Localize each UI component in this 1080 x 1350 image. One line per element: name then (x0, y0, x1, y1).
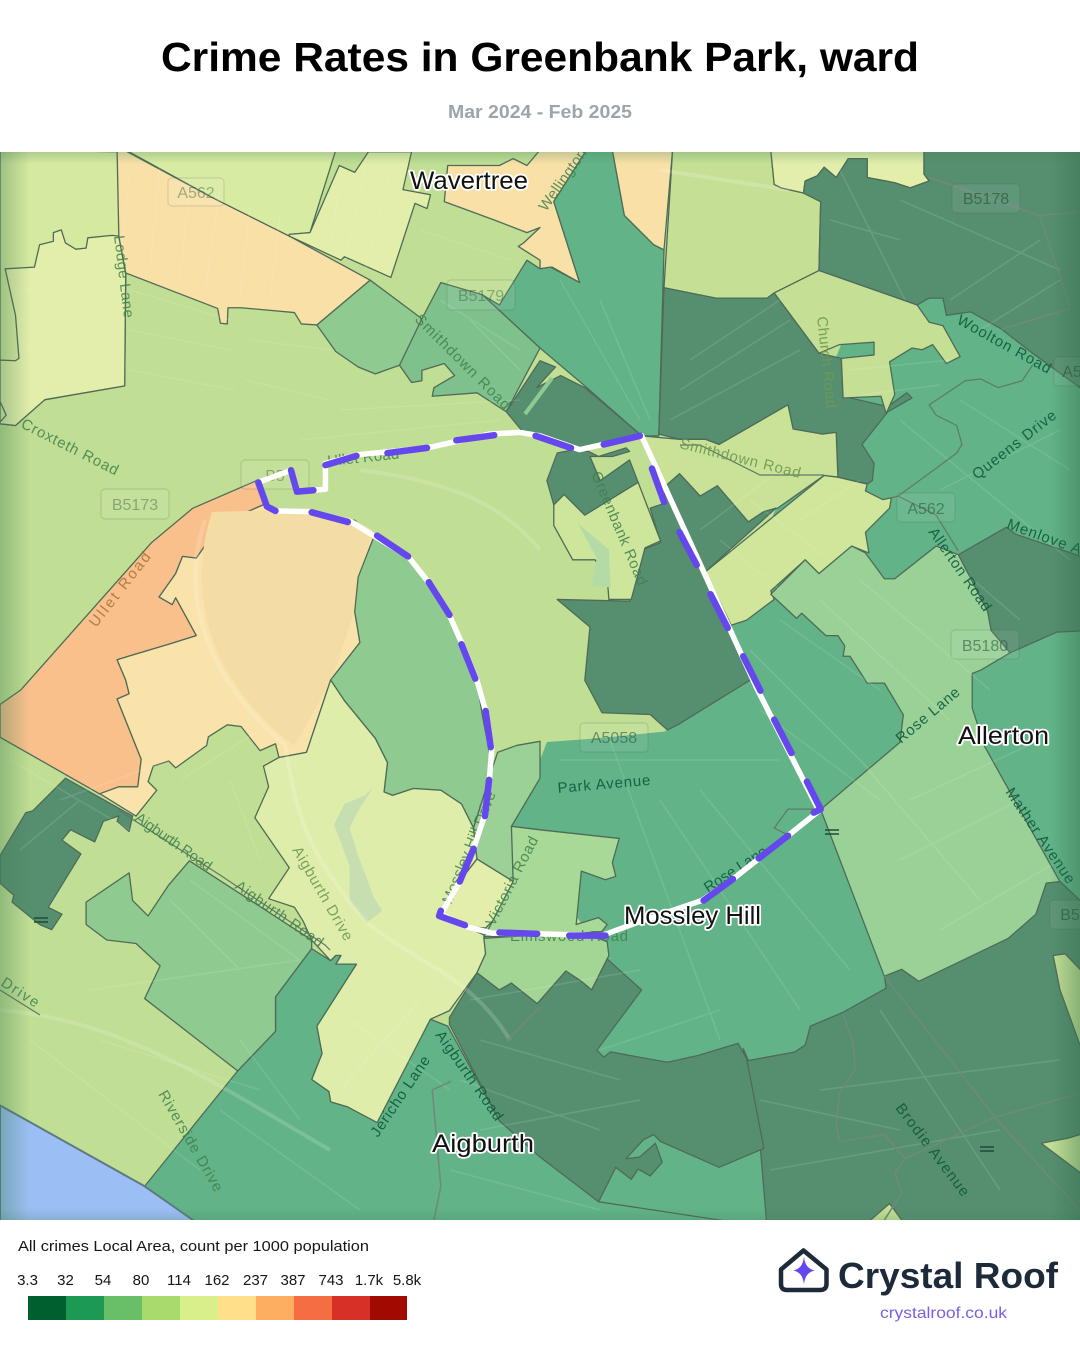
legend value labels: 80 (133, 1272, 149, 1289)
legend value labels: 32 (57, 1272, 74, 1289)
region: north pale block (664, 150, 821, 298)
shield A562 east: A562 (907, 501, 945, 518)
legend colour scale (28, 1296, 407, 1320)
label: Church Road: Church Road (813, 316, 840, 409)
region: dark centre north (659, 288, 912, 484)
region: mid green below Elmswood (477, 933, 609, 1004)
legend value labels: 162 (204, 1272, 230, 1289)
shield A5058 (580, 723, 648, 752)
region: dark Menlove (958, 527, 1080, 653)
label: Riverside Drive: Riverside Drive (155, 1088, 226, 1195)
region: large medium green east (511, 288, 1080, 1231)
label: Queens Drive: Queens Drive (969, 407, 1060, 483)
region: light striped Victoria Road (484, 826, 619, 937)
shield B5 east: B5 (1060, 907, 1080, 924)
logo url: crystalroof.co.uk (880, 1305, 1008, 1322)
legend title: All crimes Local Area, count per 1000 population (18, 1238, 369, 1255)
region: pale bottom sliver (871, 1203, 902, 1231)
region: dark Greenbank Road blocks (547, 448, 638, 515)
label: Mather Avenue: Mather Avenue (1002, 785, 1078, 887)
region: pale Smithdown triangle (642, 405, 838, 522)
region: tan Sefton Park north (100, 505, 374, 816)
label: Aigburth Drive: Aigburth Drive (289, 844, 356, 944)
shield B5 east (1050, 900, 1080, 929)
ward boundary: Greenbank Park (258, 432, 821, 936)
shield A562 (168, 178, 224, 206)
street texture (0, 165, 1070, 1210)
region: medium green Aigburth Vale (144, 948, 723, 1220)
label: Rose Lane: Rose Lane (893, 684, 963, 747)
region: tan Wavertree (444, 150, 587, 283)
region: mid green Aigburth Road (86, 861, 312, 1071)
region: Greenbank park water strip (578, 524, 611, 587)
region: north-west outer (0, 150, 126, 426)
region: top pale jagged (771, 150, 929, 193)
label: Aigburth Road west: Aigburth Road (132, 809, 215, 875)
shield A562: A562 (177, 185, 215, 202)
shield A5 east (1054, 357, 1080, 386)
shield B5178: B5178 (963, 191, 1009, 208)
legend value labels: 387 (280, 1272, 306, 1289)
legend (17, 1238, 422, 1320)
place: Mossley Hill: Mossley Hill (624, 902, 761, 930)
legend value labels: 5.8k (393, 1272, 422, 1289)
shield B5180 (951, 630, 1019, 659)
ward outline white (258, 432, 819, 936)
subtitle: date range: Mar 2024 - Feb 2025 (448, 102, 632, 122)
region: Sefton Park lake (334, 787, 382, 923)
region: mid pale green Allerton (771, 546, 1060, 982)
region: pale Allerton Road block (705, 475, 891, 625)
legend value labels: 237 (243, 1272, 268, 1289)
region: dark Greenbank south (557, 474, 776, 730)
region: pale north terrace (289, 152, 430, 277)
place: Wavertree: Wavertree (410, 167, 528, 195)
road labels (0, 146, 1080, 1200)
ward dashes purple (258, 435, 821, 936)
region: north-west pale inner (0, 230, 126, 426)
shield B5179 (447, 280, 515, 310)
region: dark strip blocks (506, 361, 640, 448)
region: tan park darker centre (204, 510, 372, 688)
shield B5173: B5173 (112, 497, 158, 514)
shield B5180: B5180 (962, 638, 1008, 655)
logo wordmark: Crystal Roof (838, 1255, 1059, 1296)
label: Aigburth Road middle: Aigburth Road (232, 877, 327, 951)
region: tan wedge north (612, 150, 673, 250)
label: Victoria Road: Victoria Road (482, 834, 542, 929)
shield A562 east (897, 493, 955, 522)
region: pale small Mossley block (441, 859, 513, 928)
logo: Crystal Roof (781, 1250, 1059, 1322)
icon: house with star (781, 1250, 826, 1290)
label: Woolton Road: Woolton Road (954, 312, 1054, 377)
region: pale Sefton Park (255, 680, 486, 1124)
label: Allerton Road: Allerton Road (925, 525, 995, 615)
region: dark north-east (803, 150, 1080, 396)
vignette (0, 152, 1080, 1220)
region: mid green Victoria Road (474, 741, 540, 938)
region: pale Church Road (774, 271, 960, 413)
region boundary lines (0, 178, 1080, 1220)
label: Ullet Road diagonal: Ullet Road (86, 549, 155, 630)
label: Jericho Lane: Jericho Lane (367, 1053, 434, 1140)
shield B5 at Ullet Road (241, 460, 309, 489)
label: Ullet Road top: Ullet Road (327, 446, 400, 470)
road shields (101, 178, 1080, 929)
shield B5173 (101, 489, 169, 519)
legend value labels: 54 (95, 1272, 111, 1289)
region: tan north A562 (117, 150, 370, 325)
label: Mossley Hill Drive: Mossley Hill Drive (439, 789, 500, 906)
label: Wellington: Wellington (535, 146, 591, 214)
shield A5058: A5058 (591, 730, 637, 747)
label: Elmswood Road: Elmswood Road (510, 928, 628, 945)
rail station markers (34, 830, 994, 1151)
region: mid green B5179 (400, 283, 540, 412)
legend value labels: 114 (167, 1272, 191, 1289)
region: pale top middle (126, 150, 336, 236)
region: pale south-east edge (1053, 954, 1080, 1059)
place labels (410, 167, 1049, 1158)
label: Greenbank Road: Greenbank Road (587, 469, 651, 588)
shield B5179: B5179 (458, 288, 504, 305)
region: pale south-east corner (1041, 1131, 1080, 1179)
title: Crime Rates in Greenbank Park, ward (161, 34, 919, 80)
label: Brodie Avenue: Brodie Avenue (892, 1100, 973, 1200)
label: Smithdown Road east: Smithdown Road (678, 435, 802, 482)
label: Croxteth Road: Croxteth Road (18, 415, 121, 479)
place: Aigburth: Aigburth (432, 1130, 534, 1158)
region: dark south-east (743, 881, 1080, 1231)
legend value labels (17, 1272, 422, 1289)
region: orange Ullet Road (0, 481, 263, 794)
region: dark west block (0, 778, 133, 930)
label: Lodge Lane: Lodge Lane (110, 234, 137, 319)
region: mid green Greenbank park (331, 537, 492, 828)
place: Allerton: Allerton (958, 722, 1049, 750)
legend value labels: 1.7k (355, 1272, 384, 1289)
label: Park Avenue: Park Avenue (557, 772, 651, 797)
label: Aigburth Road south: Aigburth Road (432, 1028, 506, 1124)
shield B5178 (952, 184, 1020, 213)
map base layer (0, 152, 841, 1186)
label: Smithdown Road north: Smithdown Road (411, 311, 514, 413)
legend value labels: 3.3 (17, 1272, 38, 1289)
legend value labels: 743 (318, 1272, 344, 1289)
shield B5 at Ullet Road: B5 (265, 468, 285, 485)
region: dark Aigburth Hall (449, 959, 764, 1202)
region: mid green Smithdown west (317, 280, 422, 374)
region: pale Greenbank Road (554, 482, 661, 599)
label: Rose Lane lower: Rose Lane (701, 843, 771, 896)
band between dark strips (525, 378, 552, 414)
region: river Mersey (0, 1105, 193, 1231)
region: medium green north wedge (482, 150, 664, 436)
